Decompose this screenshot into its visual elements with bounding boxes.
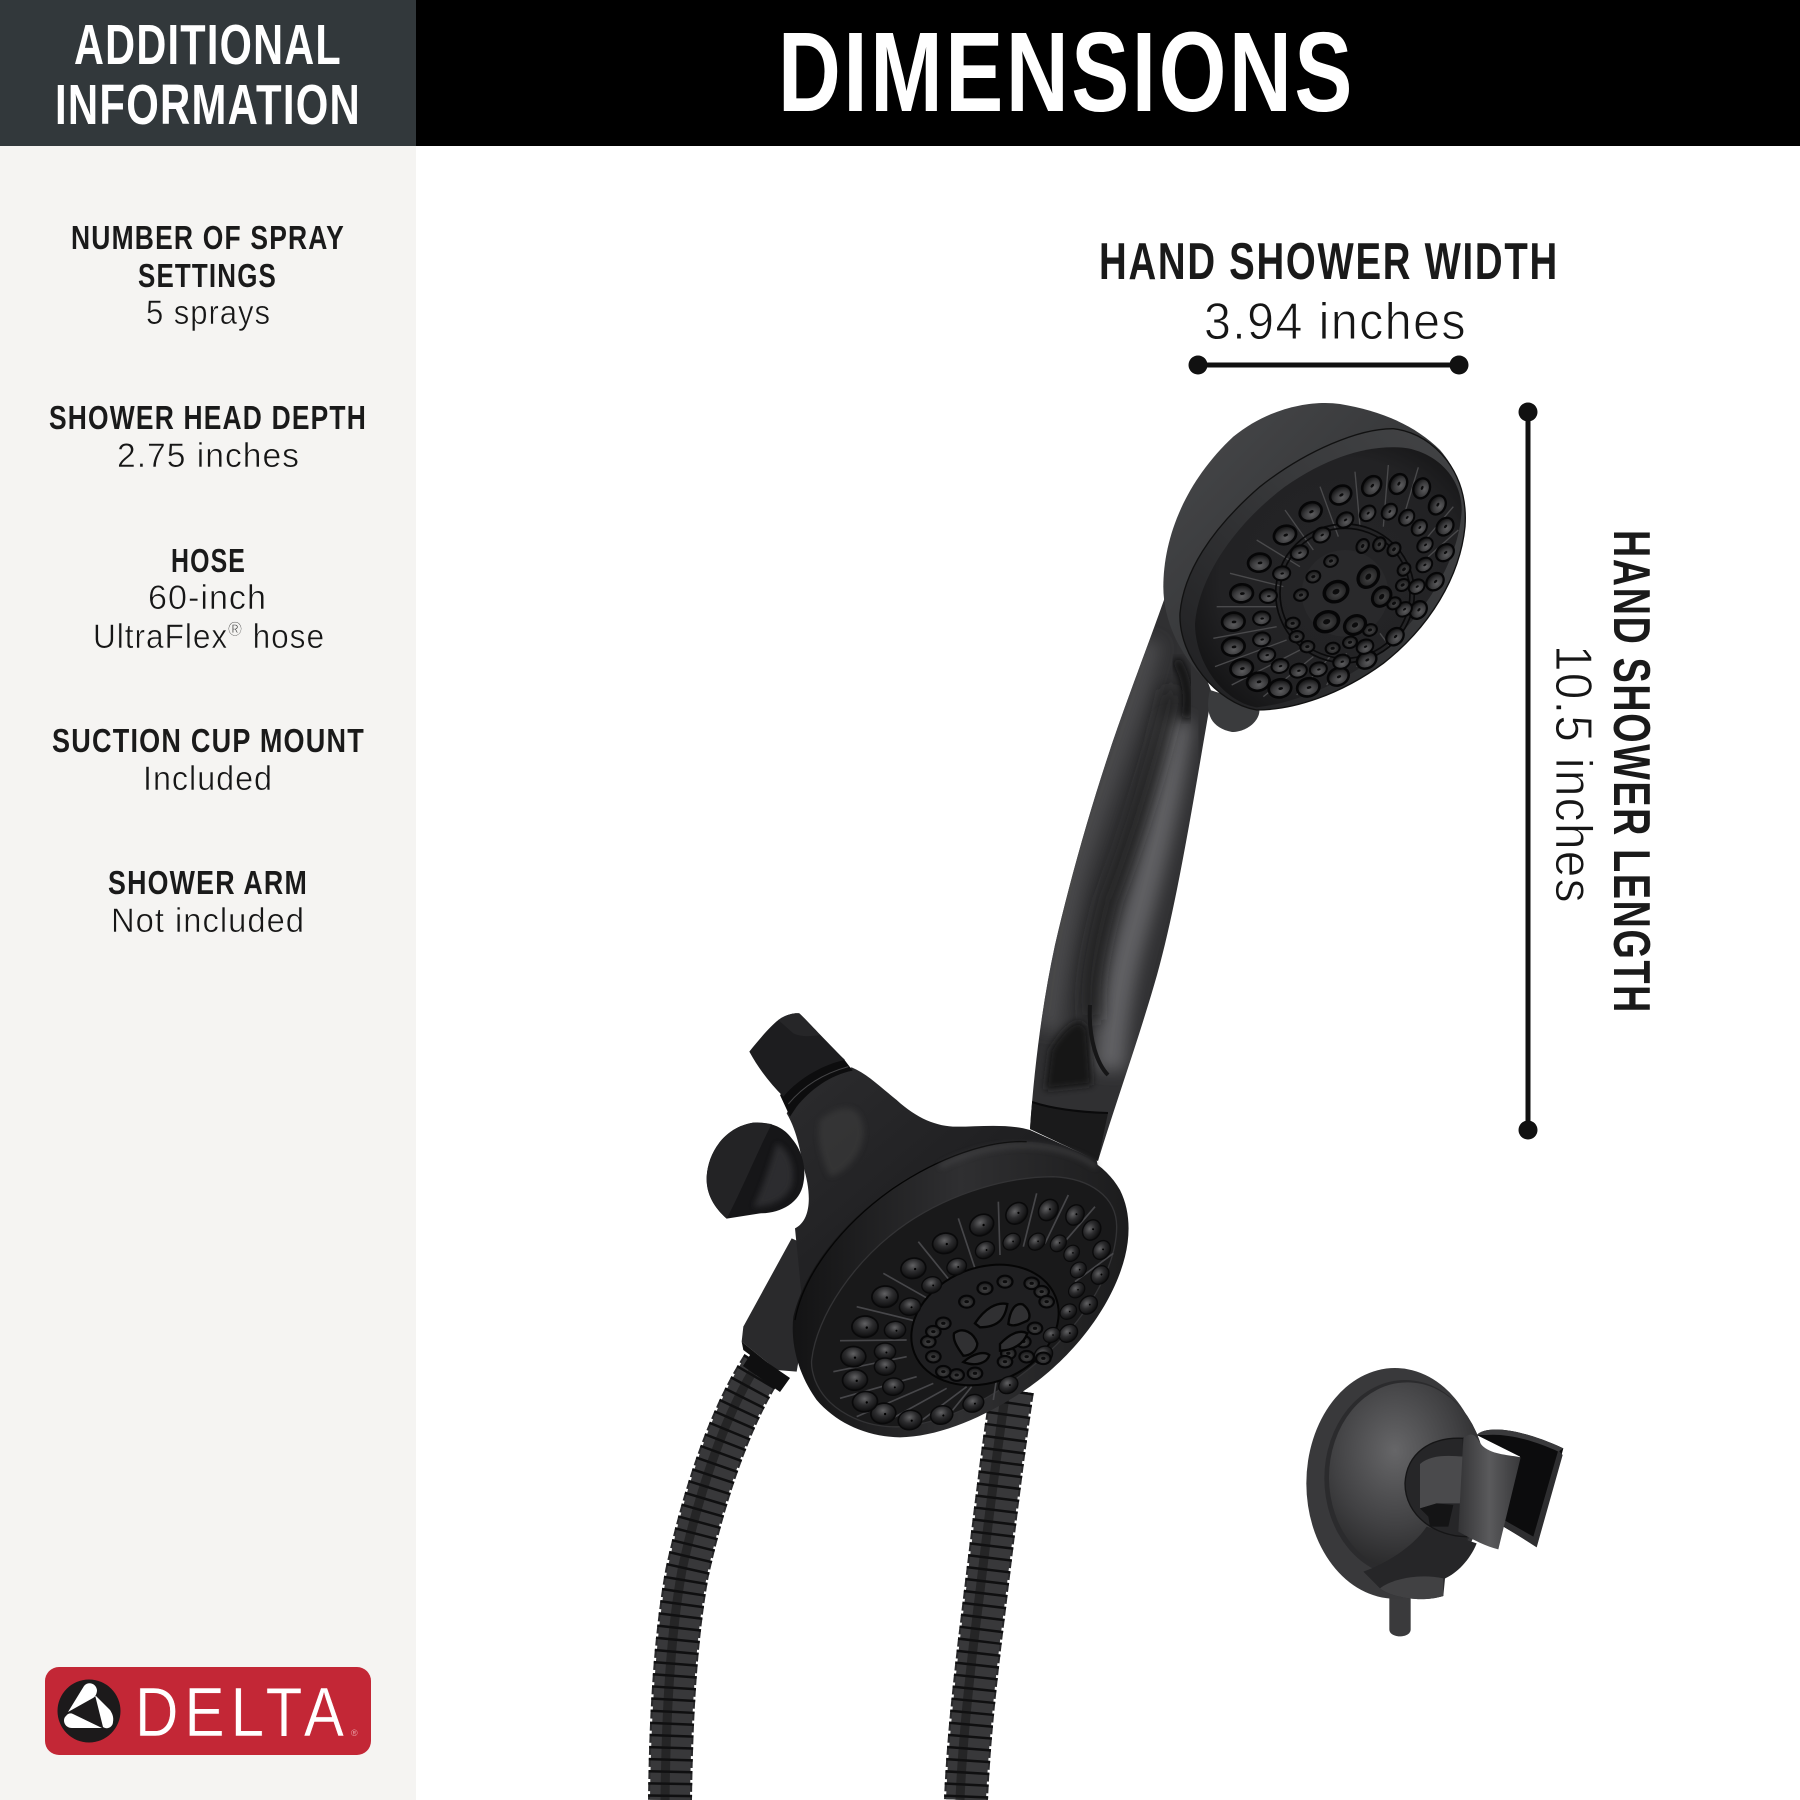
panel: additional information sidebar xyxy=(0,0,416,1800)
hand shower head xyxy=(1163,403,1465,710)
sidebar heading: INFORMATION xyxy=(55,73,361,137)
nozzles: center xyxy=(1310,560,1397,640)
logo: delta: ® xyxy=(351,1728,358,1738)
swivel collar xyxy=(780,1058,853,1117)
title: dimensions: DIMENSIONS xyxy=(778,9,1355,135)
logo: delta: DELTA xyxy=(135,1673,350,1751)
header bar: dimensions xyxy=(416,0,1800,146)
body xyxy=(787,1067,1113,1347)
spec: shower head depth: 2.75 inches xyxy=(117,437,300,475)
spec: hose: hose xyxy=(243,618,325,656)
spec: number of spray settings: SETTINGS xyxy=(138,257,277,294)
spec: hose: ® xyxy=(228,619,243,641)
suction cup mount xyxy=(1306,1368,1563,1636)
length arrow xyxy=(1518,402,1538,1140)
swivel cap xyxy=(749,1013,845,1097)
nozzles: inner ring xyxy=(874,1229,1090,1397)
spec: number of spray settings xyxy=(71,219,345,332)
spec: number of spray settings: NUMBER OF SPRAY xyxy=(71,219,345,256)
ribs xyxy=(833,1193,1113,1427)
spray face xyxy=(1195,447,1462,707)
spray handle lever xyxy=(1208,690,1259,732)
spec: hose xyxy=(93,542,325,656)
nozzles: outer ring xyxy=(1219,469,1459,701)
center disc xyxy=(893,1243,1077,1407)
pivot ring xyxy=(1405,1438,1467,1537)
head rim xyxy=(793,1142,1129,1437)
center circles xyxy=(1276,524,1414,663)
mount pin xyxy=(1389,1597,1411,1636)
sidebar heading: ADDITIONAL xyxy=(74,13,342,77)
spray face xyxy=(812,1177,1117,1427)
head rim xyxy=(1180,429,1465,710)
body highlight xyxy=(819,1108,864,1177)
holder front xyxy=(1458,1434,1521,1549)
spec: hose: 60-inch xyxy=(148,579,267,617)
spec: hose: UltraFlex xyxy=(93,618,238,656)
value: 10.5 inches: 10.5 inches xyxy=(1544,645,1602,904)
sidebar heading xyxy=(55,13,361,137)
spec: hose: HOSE xyxy=(171,542,246,579)
spec: shower head depth: SHOWER HEAD DEPTH xyxy=(49,399,367,436)
hand shower handle xyxy=(1030,599,1211,1161)
spec: shower head depth xyxy=(49,399,367,475)
nozzles: outer ring xyxy=(840,1194,1115,1432)
logo: delta xyxy=(45,1667,371,1755)
lower bracket xyxy=(1363,1527,1477,1599)
fixed shower head xyxy=(707,1013,1129,1437)
nozzles: center cluster xyxy=(920,1275,1055,1382)
width arrow xyxy=(1188,356,1468,374)
spec: shower arm: SHOWER ARM xyxy=(108,864,308,901)
hose: left strand xyxy=(665,1363,763,1800)
spec: suction cup mount: SUCTION CUP MOUNT xyxy=(52,722,365,759)
center teardrops xyxy=(954,1304,1029,1364)
spec: number of spray settings: 5 sprays xyxy=(146,294,271,332)
nozzles: middle ring xyxy=(1251,499,1437,681)
hose connector xyxy=(742,1342,777,1370)
spec: suction cup mount: Included xyxy=(143,760,273,798)
spec: shower arm xyxy=(108,864,308,940)
product: hand shower with mount and hose xyxy=(665,403,1563,1800)
hose: right strand xyxy=(960,1390,1012,1800)
suction disc xyxy=(1306,1368,1484,1599)
head dome xyxy=(1163,403,1465,710)
value: 3.94 inches: 3.94 inches xyxy=(1204,293,1467,351)
label: hand shower length: HAND SHOWER LENGTH xyxy=(1602,530,1660,1014)
swivel mount bracket xyxy=(742,1238,807,1372)
spec: suction cup mount xyxy=(52,722,365,798)
hose ferrule xyxy=(743,1352,790,1392)
knob xyxy=(707,1123,804,1219)
holder back wall xyxy=(1477,1430,1563,1547)
spec: shower arm: Not included xyxy=(111,902,305,940)
label: hand shower width: HAND SHOWER WIDTH xyxy=(1099,233,1559,291)
length dimension xyxy=(1518,402,1660,1140)
nozzles: inner cluster xyxy=(1284,534,1414,656)
face ribs xyxy=(1213,465,1458,697)
width dimension xyxy=(1099,233,1559,374)
